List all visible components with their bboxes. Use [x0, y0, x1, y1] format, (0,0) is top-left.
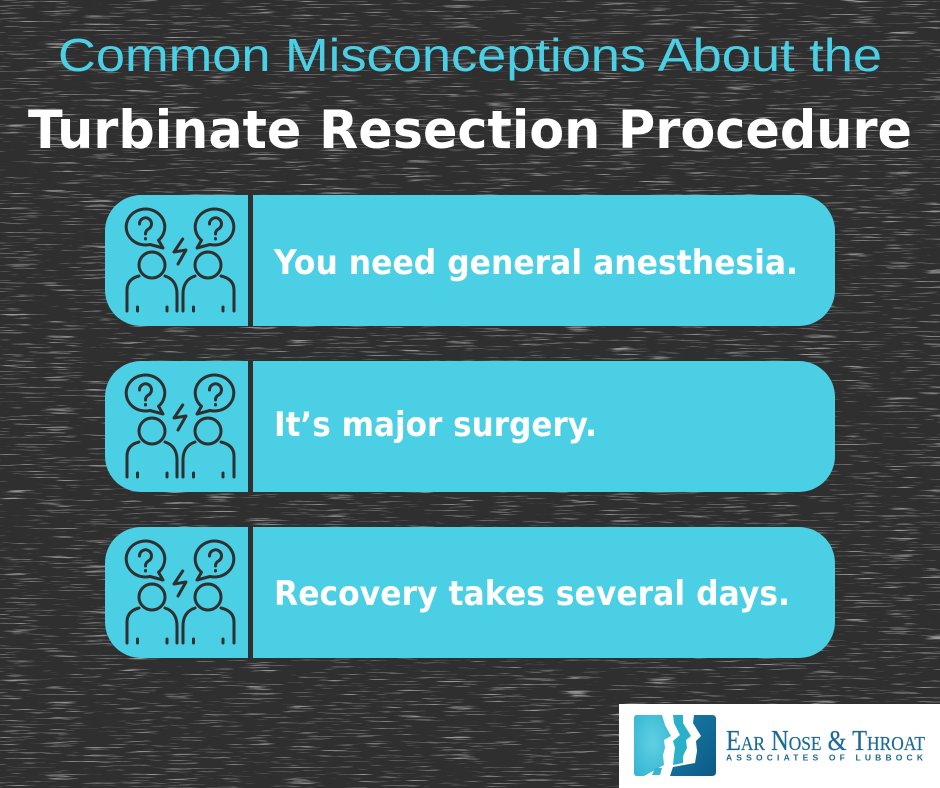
misconception text 2: It’s major surgery.	[274, 405, 597, 444]
icon: two people with questions	[126, 541, 234, 643]
panel: misconception 3	[105, 527, 835, 658]
title line 2: Turbinate Resection Procedure	[28, 100, 912, 161]
icon: logo faces	[634, 715, 716, 776]
icon: two people with questions	[126, 375, 234, 477]
logo tagline: ASSOCIATES OF LUBBOCK	[726, 752, 924, 762]
icon: two people with questions	[126, 209, 234, 311]
logo name: EAR NOSE & THROAT	[726, 726, 925, 757]
panel: misconception 1	[105, 195, 835, 326]
misconception text 3: Recovery takes several days.	[274, 574, 790, 613]
title	[28, 29, 912, 161]
logo: Ear Nose & Throat Associates of Lubbock	[619, 704, 940, 788]
panel: misconception 2	[105, 361, 835, 492]
title line 1: Common Misconceptions About the	[58, 29, 882, 81]
misconception text 1: You need general anesthesia.	[273, 243, 798, 282]
